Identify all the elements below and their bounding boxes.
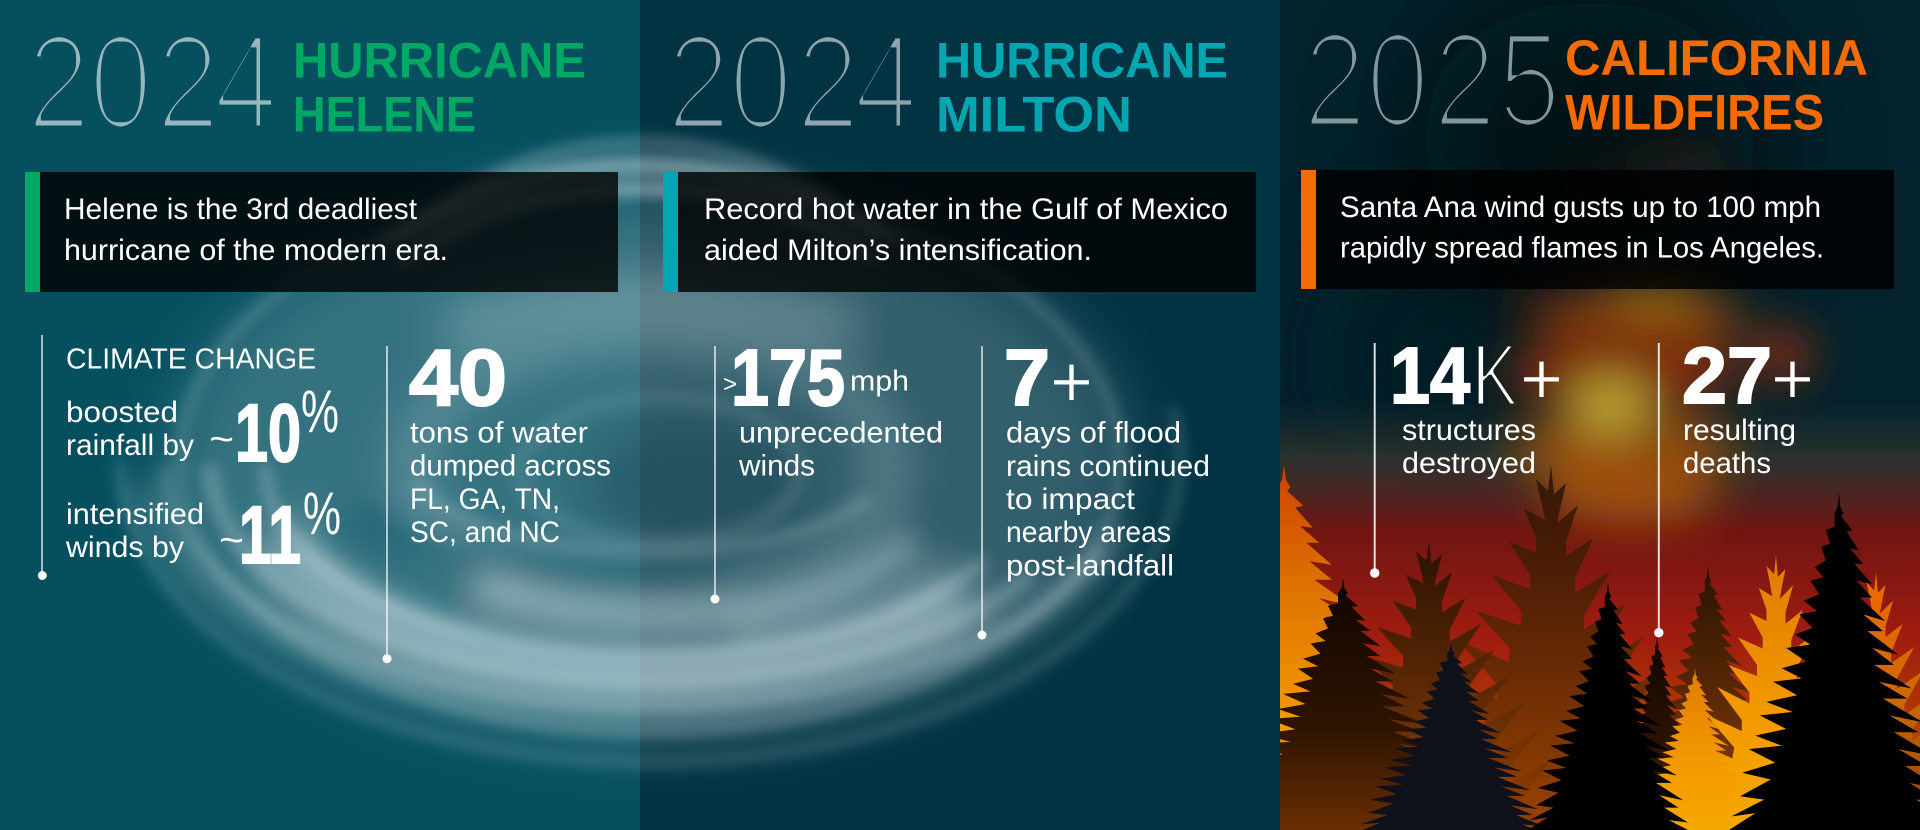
stat: climate change	[38, 335, 341, 581]
stat: 7+ days of flood rains: +	[1050, 340, 1093, 423]
heading: Hurricane Milton: HURRICANE	[936, 32, 1228, 88]
stat: 7+ days of flood rains	[978, 333, 1210, 640]
heading: California Wildfires	[1565, 30, 1868, 140]
callout: record hot water: aided Milton’s intensification.	[704, 234, 1092, 267]
stat: 7+ days of flood rains: post-landfall	[1006, 550, 1174, 583]
stat: 27+ resulting deaths: 27	[1682, 331, 1772, 420]
callout: Santa Ana winds	[1301, 170, 1894, 289]
stat: 175 mph winds: mph	[850, 366, 909, 398]
callout: record hot water	[663, 172, 1256, 292]
stat: climate change: ~	[219, 520, 244, 562]
stat: 14K+ structures destroyed: 14	[1390, 331, 1470, 420]
stat: climate change: CLIMATE CHANGE	[66, 344, 316, 376]
stat: 27+ resulting deaths	[1654, 331, 1814, 637]
stat: 14K+ structures destroyed: K	[1472, 327, 1518, 424]
stat: climate change: boosted	[66, 396, 178, 429]
stat: 27+ resulting deaths: deaths	[1683, 447, 1771, 480]
panel: California Wildfires	[1301, 5, 1894, 637]
heading: Hurricane Milton: MILTON	[936, 87, 1132, 143]
stat: 7+ days of flood rains: nearby areas	[1006, 516, 1171, 549]
stat: 40 tons of water: 40	[409, 333, 507, 422]
heading: California Wildfires: CALIFORNIA	[1565, 30, 1868, 86]
stat: 7+ days of flood rains: to impact	[1006, 483, 1136, 516]
forest silhouettes	[1280, 465, 1920, 830]
stat: 7+ days of flood rains: 7	[1004, 333, 1050, 422]
callout: deadliest hurricane: hurricane of the modern era.	[64, 234, 448, 267]
callout: Santa Ana winds: rapidly spread flames in Los Angeles.	[1340, 232, 1824, 265]
hurricane swirl image	[120, 142, 1180, 778]
stat: 40 tons of water: FL, GA, TN,	[410, 483, 560, 516]
heading: Hurricane Helene: HURRICANE	[293, 32, 586, 88]
stat: 175 mph winds: winds	[738, 450, 815, 483]
stat: 175 mph winds: >	[723, 371, 737, 398]
stat: 175 mph winds: unprecedented	[739, 417, 943, 450]
heading: Hurricane Helene: HELENE	[293, 87, 476, 143]
stat: 14K+ structures destroyed	[1370, 327, 1563, 578]
stat: 27+ resulting deaths: resulting	[1683, 414, 1796, 447]
stat: 175 mph winds: 175	[731, 333, 845, 422]
heading: California Wildfires: WILDFIRES	[1565, 84, 1824, 140]
panel: Hurricane Milton	[663, 7, 1256, 640]
stat: 14K+ structures destroyed: destroyed	[1402, 447, 1536, 480]
stat: climate change: rainfall by	[66, 429, 194, 462]
heading: Hurricane Helene	[293, 32, 586, 143]
stat: 14K+ structures destroyed: +	[1520, 337, 1563, 420]
stat: 40 tons of water: dumped across	[410, 450, 611, 483]
callout: record hot water: Record hot water in the Gulf of Mexico	[704, 193, 1228, 226]
year 2025: 2025	[1303, 5, 1561, 155]
heading: Hurricane Milton	[936, 32, 1228, 143]
panel: Hurricane Helene	[25, 7, 618, 663]
stat: 40 tons of water: SC, and NC	[410, 516, 560, 549]
stat: climate change: 10	[235, 388, 301, 479]
callout: deadliest hurricane	[25, 172, 618, 292]
panel backgrounds	[0, 0, 1280, 830]
stat: 14K+ structures destroyed: structures	[1402, 414, 1536, 447]
stat: climate change: %	[301, 378, 339, 445]
stat: 40 tons of water: tons of water	[410, 417, 588, 450]
stat: 7+ days of flood rains: rains continued	[1006, 450, 1210, 483]
callout: Santa Ana winds: Santa Ana wind gusts up to 100 mph	[1340, 191, 1821, 224]
stat: 40 tons of water	[382, 333, 611, 663]
year 2024: 2024	[27, 7, 277, 157]
stat: climate change: %	[303, 480, 341, 547]
panel: California wildfires background	[1280, 0, 1920, 830]
stat: 7+ days of flood rains: days of flood	[1006, 417, 1181, 450]
callout: deadliest hurricane: Helene is the 3rd deadliest	[64, 193, 418, 226]
stat: climate change: intensified	[66, 498, 204, 531]
stat: 27+ resulting deaths: +	[1771, 337, 1814, 420]
stat: climate change: winds by	[65, 531, 184, 564]
stat: climate change: 11	[239, 490, 301, 581]
stat: 175 mph winds	[710, 333, 943, 604]
stat: climate change: ~	[209, 419, 234, 461]
year 2024: 2024	[667, 7, 917, 157]
